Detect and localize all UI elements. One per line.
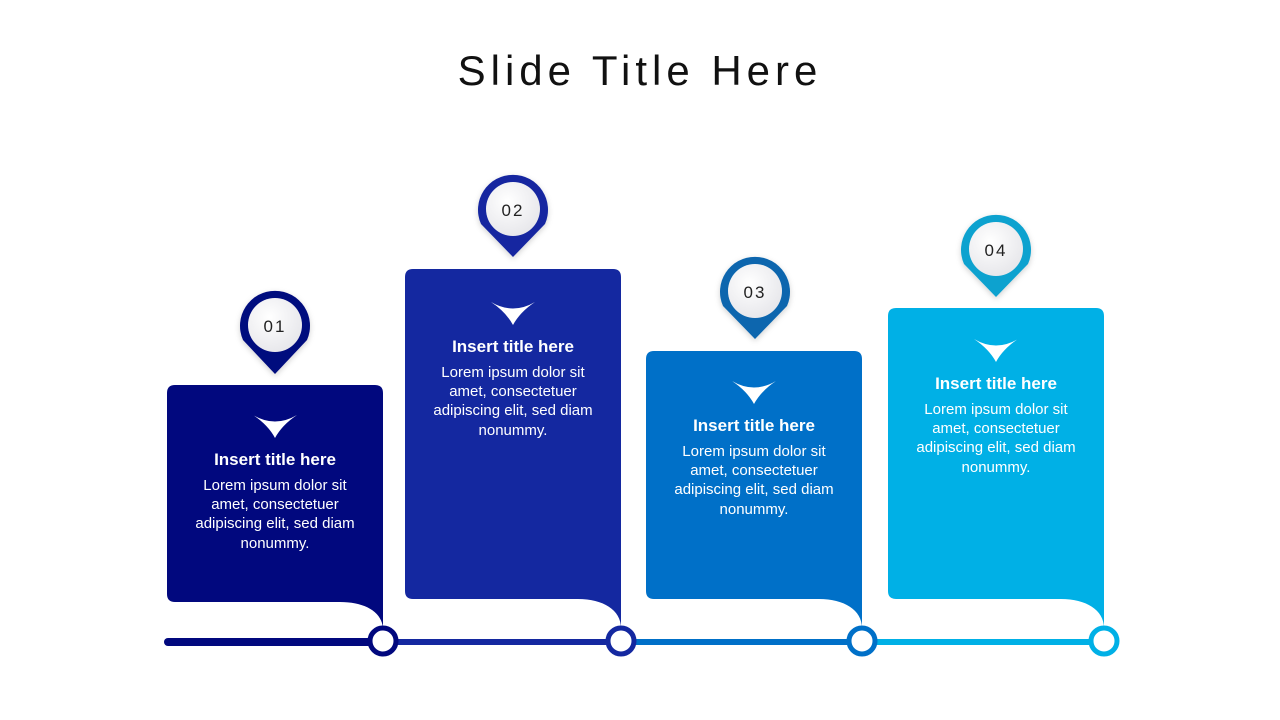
pin: 02 (478, 175, 548, 257)
pin: 03 (720, 257, 790, 339)
text: step 02: nonummy. (479, 422, 547, 439)
title: Slide Title Here (458, 47, 822, 94)
text: step 03 (674, 416, 834, 518)
icon: chevron 01 (253, 415, 297, 438)
node 01 (370, 628, 396, 654)
node 02 (608, 628, 634, 654)
icon: chevron 03 (732, 381, 776, 404)
text: step 03: adipiscing elit, sed diam (674, 481, 834, 498)
pin: 02: 02 (502, 201, 524, 220)
node 04 (1091, 628, 1117, 654)
text: step 04: nonummy. (962, 459, 1030, 476)
text: step 01: adipiscing elit, sed diam (195, 515, 355, 532)
text: step 02 (433, 337, 593, 439)
text: step 04: adipiscing elit, sed diam (916, 439, 1076, 456)
panel: step 03 (646, 351, 862, 628)
text: step 01: amet, consectetuer (211, 496, 339, 513)
text: step 01: Insert title here (214, 450, 336, 469)
text: step 03: nonummy. (720, 501, 788, 518)
text: step 03: Lorem ipsum dolor sit (682, 443, 827, 460)
icon: chevron 02 (491, 302, 535, 325)
text: step 04: Lorem ipsum dolor sit (924, 401, 1069, 418)
node 03 (849, 628, 875, 654)
text: step 02: amet, consectetuer (449, 383, 577, 400)
panel: step 01 (167, 385, 383, 630)
text: step 04 (916, 374, 1076, 476)
icon: chevron 04 (974, 339, 1018, 362)
pin: 03: 03 (744, 283, 766, 302)
text: step 01 (195, 450, 355, 552)
text: step 01: nonummy. (241, 535, 309, 552)
text: step 03: Insert title here (693, 416, 815, 435)
timeline (168, 638, 1104, 646)
pin: 04: 04 (985, 241, 1007, 260)
text: step 02: Lorem ipsum dolor sit (441, 364, 586, 381)
text: step 03: amet, consectetuer (690, 462, 818, 479)
text: step 04: amet, consectetuer (932, 420, 1060, 437)
panel: step 04 (888, 308, 1104, 628)
pin: 04 (961, 215, 1031, 297)
text: step 01: Lorem ipsum dolor sit (203, 477, 348, 494)
pin: 01: 01 (264, 317, 286, 336)
panel: step 02 (405, 269, 621, 628)
text: step 02: Insert title here (452, 337, 574, 356)
text: step 04: Insert title here (935, 374, 1057, 393)
text: step 02: adipiscing elit, sed diam (433, 402, 593, 419)
pin: 01 (240, 291, 310, 374)
